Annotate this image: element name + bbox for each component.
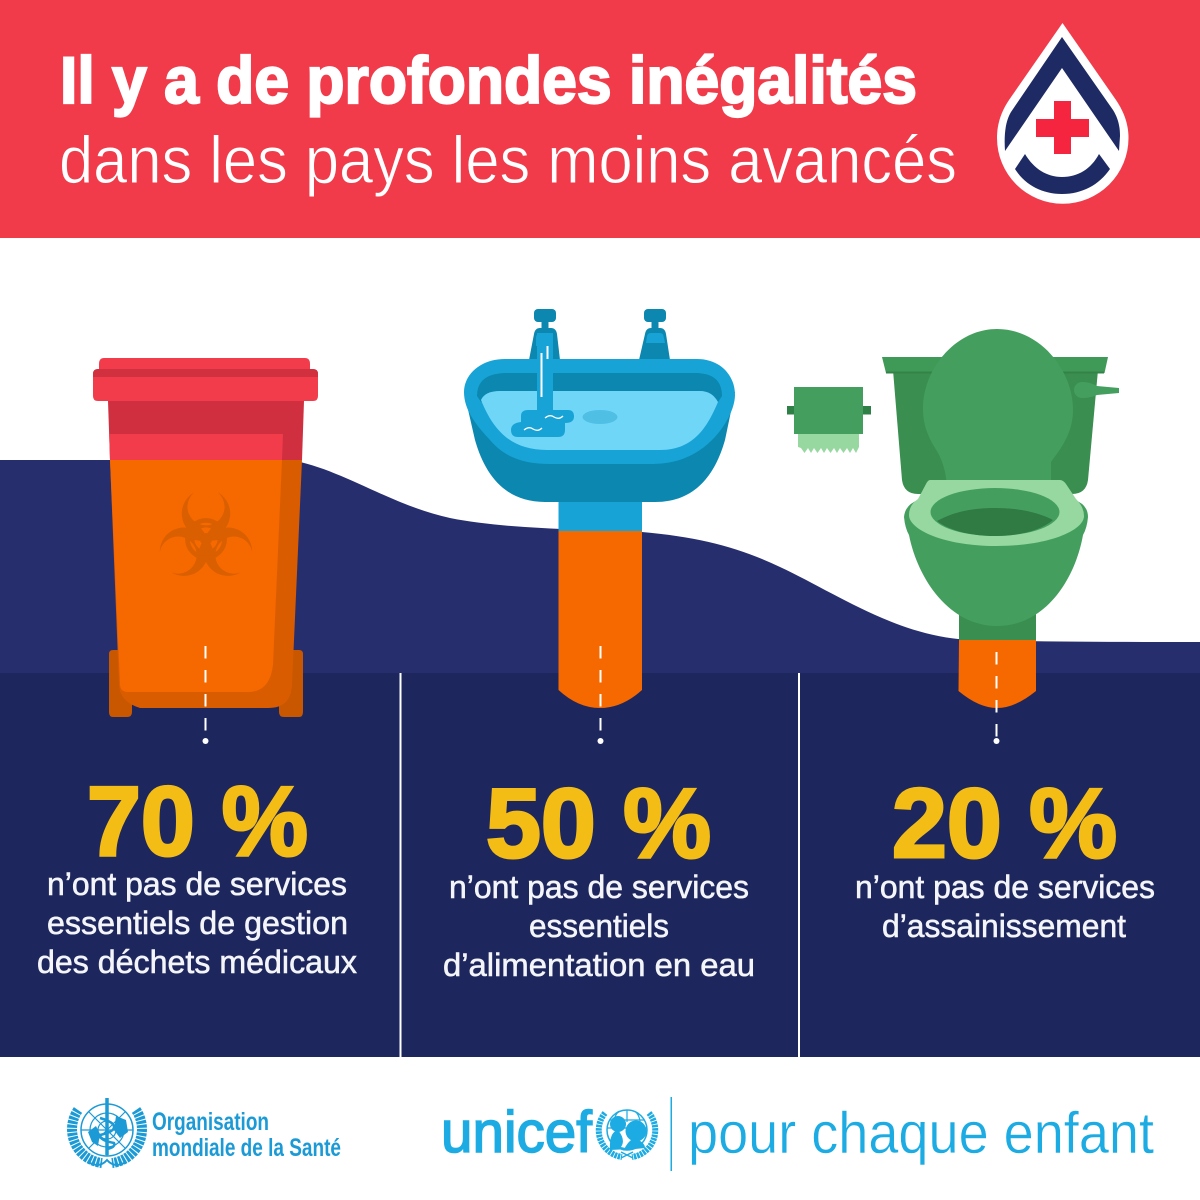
icon: WHO emblem bbox=[72, 1098, 142, 1165]
statistic: 70 percent bbox=[37, 766, 357, 980]
figure 20: 20 % bbox=[892, 768, 1117, 878]
statistic: 50 percent bbox=[443, 768, 755, 983]
flush handle bbox=[1074, 382, 1119, 398]
basin bbox=[464, 392, 735, 502]
WHO name: mondiale de la Santé bbox=[152, 1134, 341, 1162]
figure 70: 70 % bbox=[87, 766, 308, 876]
seat bbox=[909, 480, 1084, 546]
title line 2: dans les pays les moins avancés bbox=[59, 123, 957, 198]
icon: medical waste bin bbox=[93, 358, 318, 717]
bin lid bbox=[93, 358, 318, 401]
UNICEF logo bbox=[441, 1097, 1154, 1171]
title bbox=[59, 43, 957, 198]
tagline: pour chaque enfant bbox=[688, 1101, 1154, 1166]
statistic: 20 percent bbox=[855, 768, 1155, 944]
title line 1: Il y a de profondes inégalités bbox=[60, 43, 917, 117]
WHO name: Organisation bbox=[152, 1108, 269, 1136]
bowl opening bbox=[930, 488, 1060, 536]
drain bbox=[582, 410, 618, 424]
toilet pedestal bbox=[958, 605, 1036, 708]
figure 50: 50 % bbox=[486, 768, 711, 878]
caption 50: essentiels bbox=[529, 908, 669, 944]
bowl bbox=[904, 500, 1088, 626]
bin wheels bbox=[109, 650, 303, 717]
water stream and puddle bbox=[511, 333, 574, 437]
dashed pointer 1 bbox=[202, 646, 208, 744]
logo divider bbox=[670, 1097, 672, 1171]
caption 70: essentiels de gestion bbox=[47, 905, 348, 941]
icon: sink bbox=[464, 309, 735, 708]
icon: toilet paper roll bbox=[787, 387, 871, 453]
caption 70: n’ont pas de services bbox=[47, 866, 347, 902]
dark statistics band bbox=[0, 673, 1200, 1057]
header banner bbox=[0, 0, 1200, 238]
icon: water drop with cross bbox=[997, 23, 1128, 204]
unicef wordmark: unicef bbox=[441, 1100, 593, 1165]
caption 70: des déchets médicaux bbox=[37, 944, 357, 980]
caption 50 bbox=[443, 869, 755, 983]
water bbox=[481, 391, 718, 450]
bin body bbox=[108, 401, 304, 460]
WHO name bbox=[152, 1108, 341, 1162]
caption 20: d’assainissement bbox=[882, 908, 1126, 944]
wave background bbox=[0, 460, 1200, 680]
caption 50: n’ont pas de services bbox=[449, 869, 749, 905]
icon: toilet bbox=[882, 329, 1119, 708]
icon: UNICEF emblem bbox=[599, 1110, 655, 1158]
raised lid bbox=[923, 329, 1073, 490]
WHO logo bbox=[72, 1098, 341, 1165]
caption 70 bbox=[37, 866, 357, 980]
dashed pointer 2 bbox=[598, 646, 604, 744]
right tap bbox=[639, 309, 670, 363]
icon: biohazard symbol bbox=[154, 493, 258, 583]
sink pedestal bbox=[558, 495, 642, 708]
left tap bbox=[529, 309, 560, 363]
caption 50: d’alimentation en eau bbox=[443, 947, 755, 983]
caption 20 bbox=[855, 869, 1155, 944]
cistern bbox=[882, 357, 1119, 494]
dashed pointer 3 bbox=[994, 652, 1000, 744]
caption 20: n’ont pas de services bbox=[855, 869, 1155, 905]
